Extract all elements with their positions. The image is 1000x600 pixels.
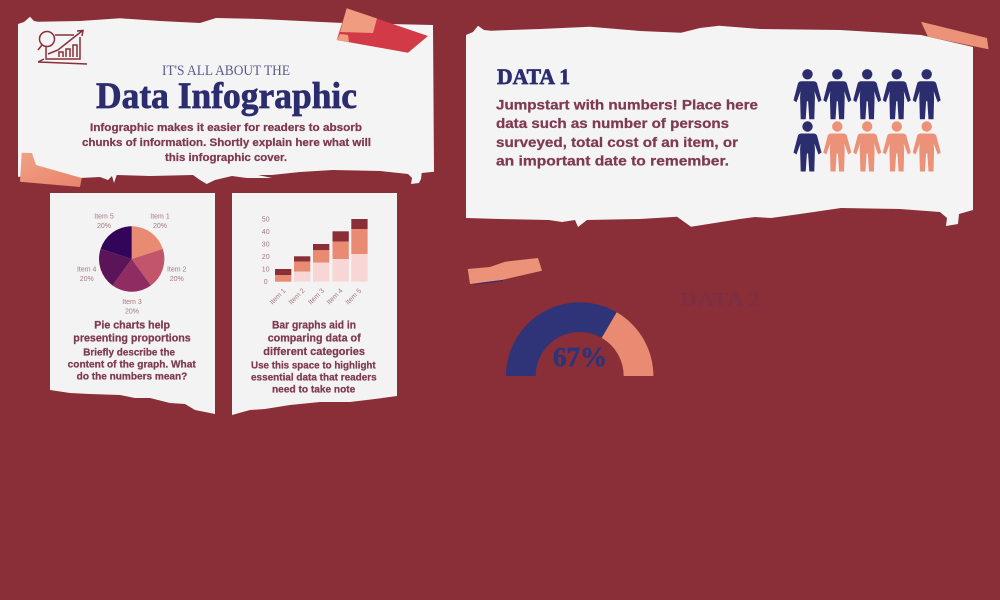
tape: bottom left	[20, 153, 82, 187]
pie description: Briefly describe the	[83, 348, 175, 359]
y axis labels: 40	[262, 229, 270, 236]
paper card	[50, 193, 215, 414]
heading: DATA 1	[497, 64, 570, 89]
y axis labels: 10	[262, 266, 270, 274]
bar description	[251, 361, 377, 395]
pie labels: Item 3	[122, 299, 142, 306]
subtitle: IT'S ALL ABOUT THE	[162, 63, 290, 79]
bar description: essential data that readers	[251, 373, 377, 384]
gauge value: 67%	[553, 342, 607, 372]
pie description: do the numbers mean?	[77, 371, 187, 382]
description: this infographic cover.	[165, 152, 287, 164]
bar description: Use this space to highlight	[251, 361, 376, 372]
stacked bars	[275, 219, 368, 282]
y axis labels: 50	[262, 216, 270, 224]
y axis labels	[262, 216, 270, 286]
pie chart	[99, 226, 164, 292]
x axis labels: Item 3	[307, 288, 326, 306]
bar heading: different categories	[263, 346, 365, 358]
pie heading: presenting proportions	[73, 333, 191, 345]
pie labels: Item 2	[167, 266, 187, 274]
pie labels: 20%	[153, 223, 167, 230]
x axis labels	[269, 288, 363, 306]
x axis labels: Item 4	[326, 288, 345, 306]
tape: top right	[921, 22, 988, 49]
pictogram: people	[794, 69, 941, 172]
panel: pie chart card	[50, 193, 215, 414]
description: surveyed, total cost of an item, or	[496, 135, 739, 150]
x axis labels: Item 2	[288, 288, 307, 306]
pie labels: 20%	[97, 223, 111, 230]
pie labels: 20%	[170, 276, 184, 283]
pie labels: Item 1	[150, 214, 170, 220]
pie labels: Item 5	[94, 214, 114, 220]
pie description: content of the graph. What	[68, 360, 196, 371]
pie heading: Pie charts help	[94, 319, 170, 331]
bar heading	[263, 319, 365, 358]
y axis labels: 30	[262, 242, 270, 248]
pie labels: Item 4	[77, 266, 97, 274]
tape: top right	[337, 8, 428, 53]
heading: faint: DATA 2	[680, 289, 760, 311]
pie description	[68, 348, 196, 382]
description: an important date to remember.	[496, 154, 729, 168]
y axis labels: 0	[264, 279, 268, 286]
bar heading: comparing data of	[268, 333, 361, 345]
paper card	[232, 193, 397, 415]
description	[496, 98, 759, 168]
description: data such as number of persons	[496, 116, 729, 131]
torn paper: title	[18, 17, 434, 184]
icon: laptop chart	[38, 30, 87, 64]
torn paper: data 1	[466, 26, 973, 227]
pie labels	[77, 214, 187, 316]
description: Infographic makes it easier for readers to absorb	[90, 122, 362, 134]
description	[82, 122, 371, 164]
gauge chart	[506, 302, 653, 376]
bar description: need to take note	[272, 384, 356, 395]
description: Jumpstart with numbers! Place here	[496, 98, 759, 112]
pie heading	[73, 319, 191, 345]
y axis labels: 20	[262, 254, 270, 261]
x axis labels: Item 1	[269, 288, 288, 306]
pie labels: 20%	[125, 308, 139, 316]
tape	[468, 258, 542, 285]
panel: data 2	[468, 258, 760, 376]
panel: title	[18, 8, 434, 187]
description: chunks of information. Shortly explain here what will	[82, 137, 371, 149]
bar heading: Bar graphs aid in	[272, 319, 356, 331]
pie labels: 20%	[80, 276, 94, 283]
x axis labels: Item 5	[345, 288, 363, 306]
panel: data 1	[466, 22, 988, 227]
panel: bar chart card	[232, 193, 397, 415]
title: Data Infographic	[96, 76, 357, 117]
